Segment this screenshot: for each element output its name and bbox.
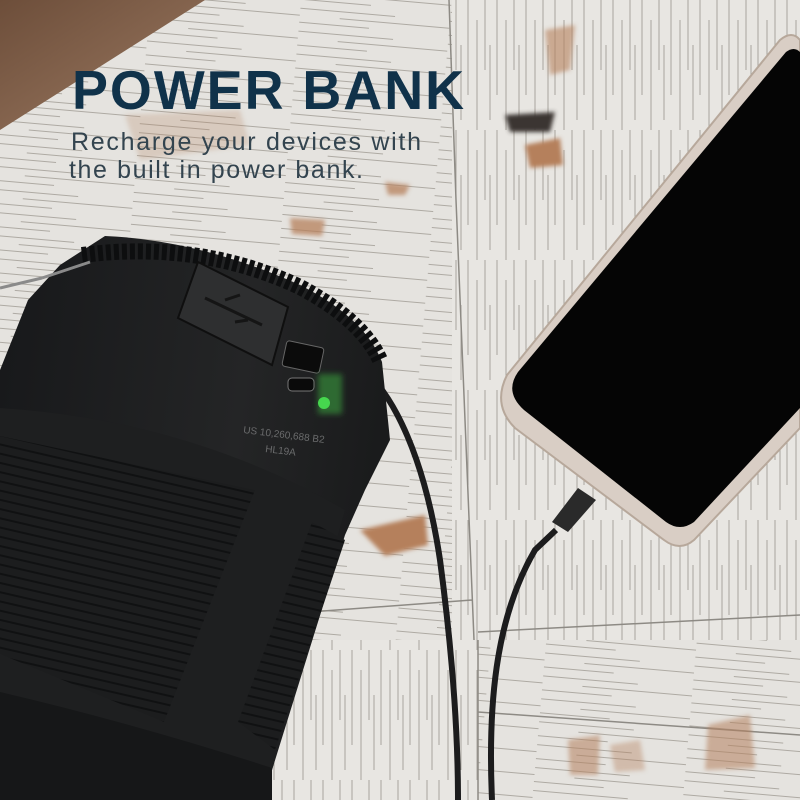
ribbed panel (0, 436, 255, 722)
subtitle: Recharge your devices with (71, 128, 421, 156)
handle (0, 262, 90, 288)
subtitle (69, 128, 421, 184)
paint chips on wood (125, 25, 755, 775)
lantern body (0, 236, 390, 800)
side ribbed panel (238, 522, 345, 750)
lantern ribbed rim (82, 251, 380, 360)
USB rubber flap (178, 262, 288, 365)
lantern: HL19A (265, 444, 297, 459)
subtitle: the built in power bank. (69, 156, 363, 184)
title: POWER BANK (72, 59, 466, 121)
lantern (0, 236, 390, 800)
charging cable to phone (325, 355, 596, 800)
lantern lower section shade (0, 408, 345, 800)
USB symbol (205, 295, 262, 325)
patent text: US 10,260,688 B2 (243, 425, 326, 446)
ports (282, 340, 324, 374)
green LED (318, 374, 342, 414)
base ring (0, 692, 272, 800)
smartphone (501, 35, 800, 546)
